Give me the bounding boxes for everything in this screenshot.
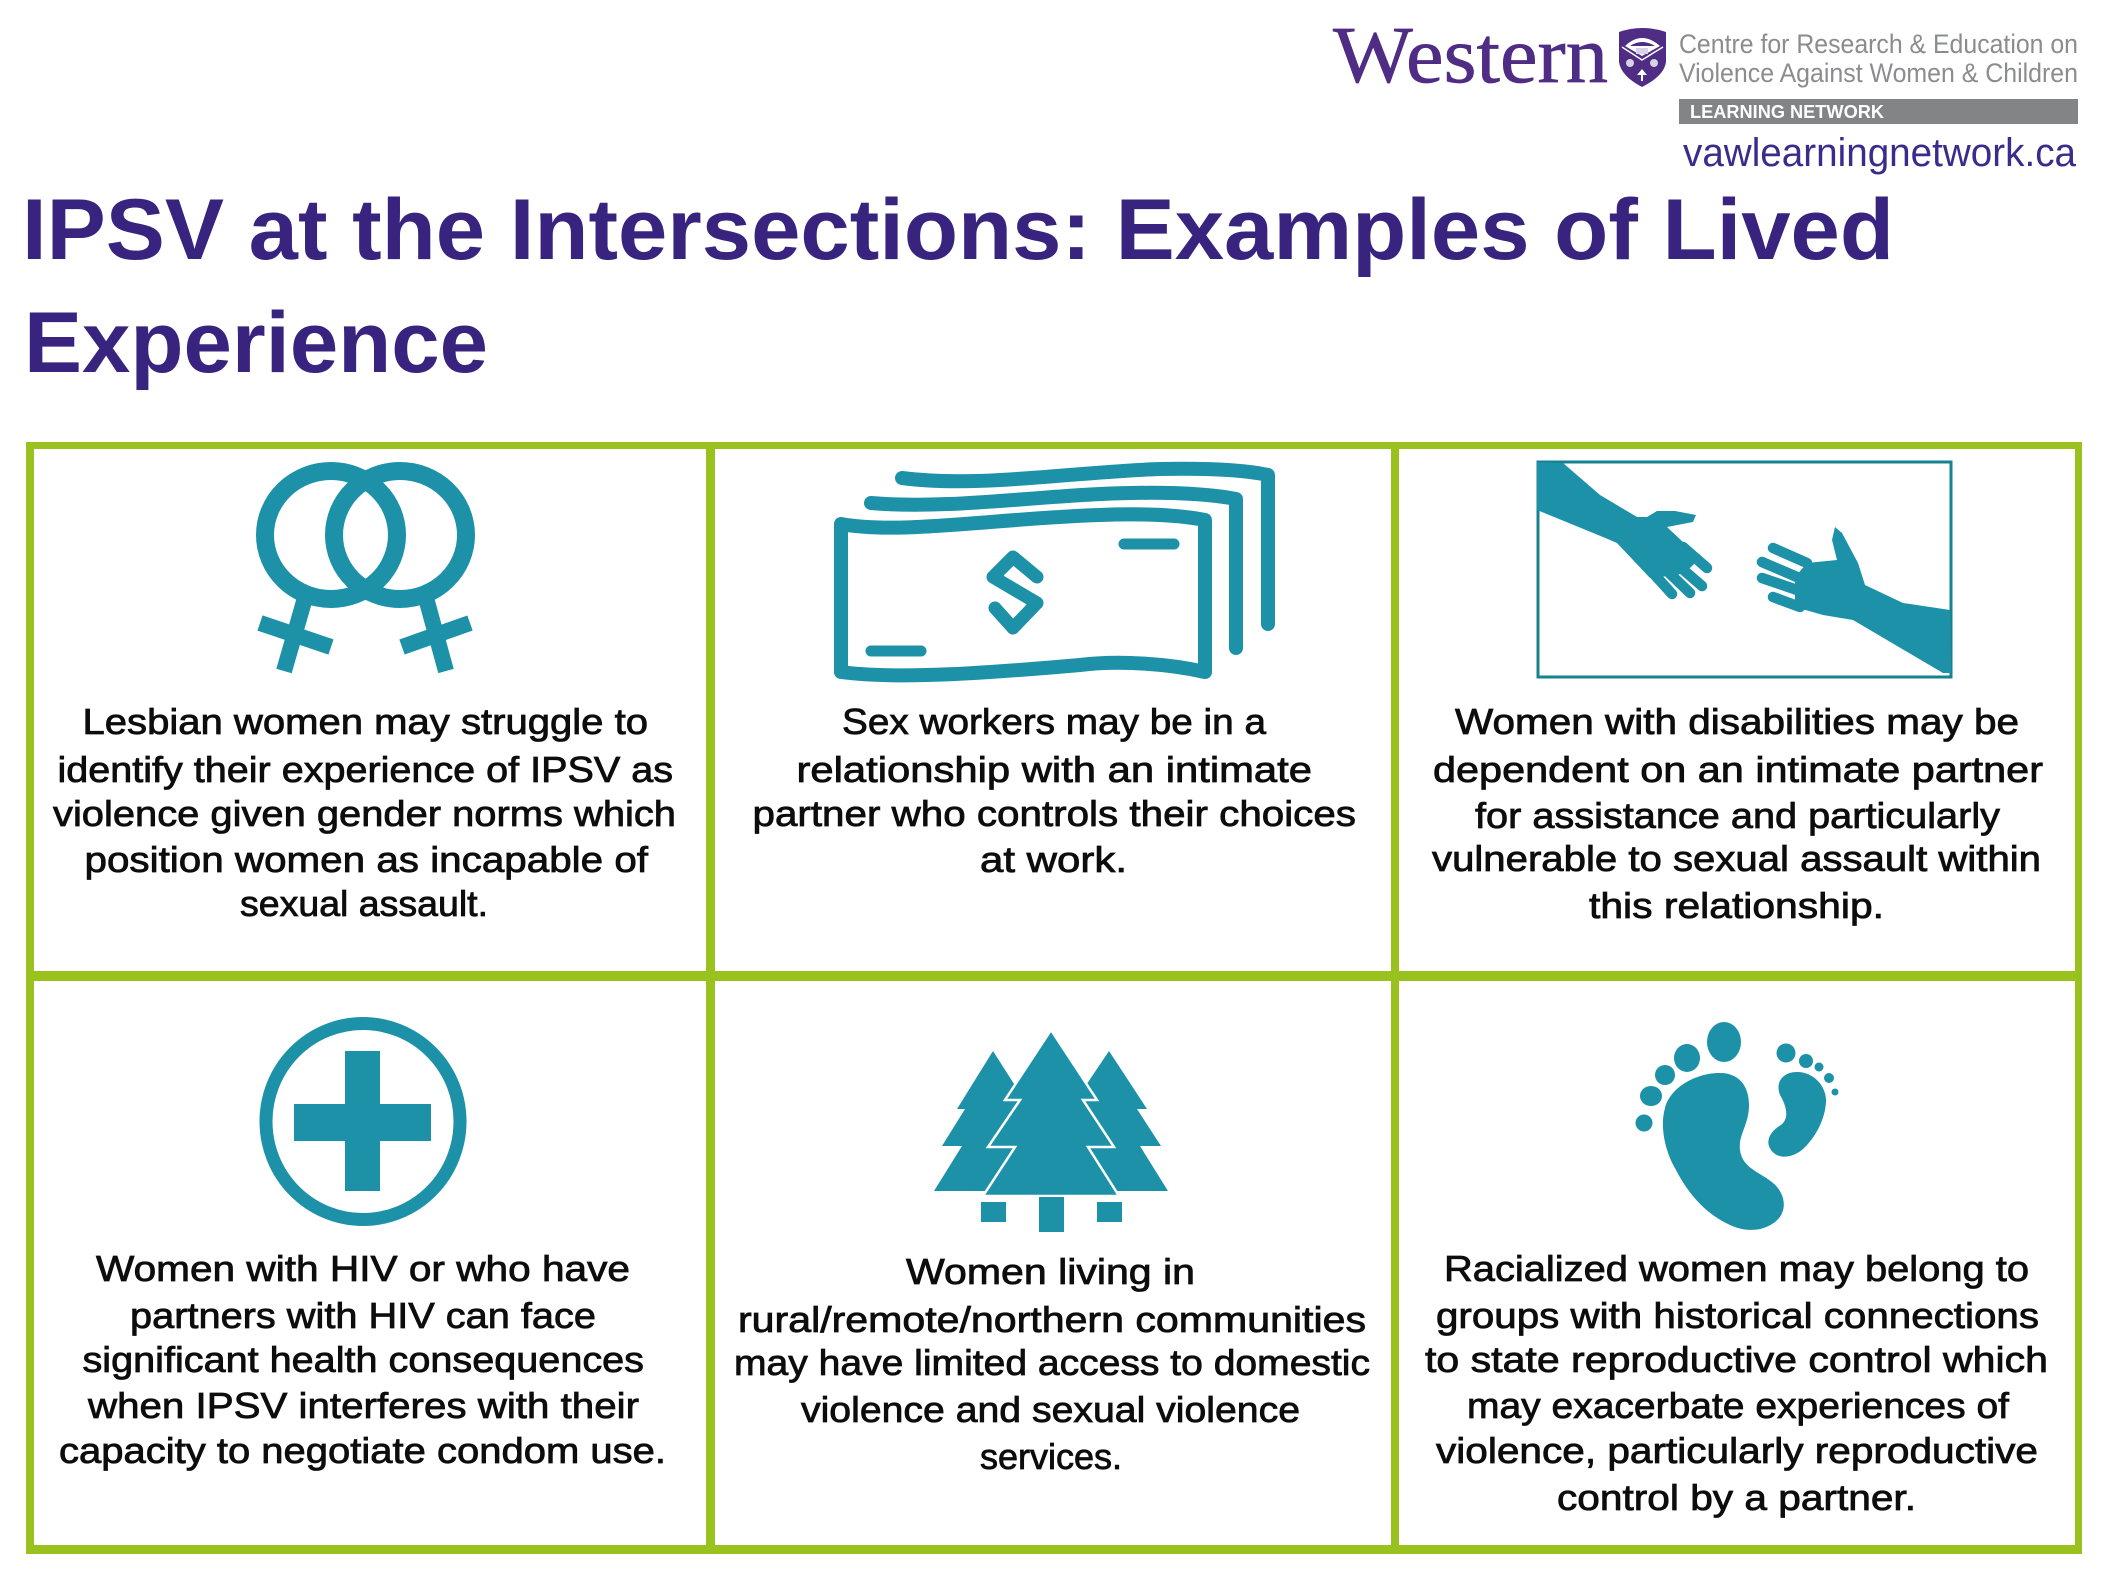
text block: violence given gender norms which [53, 793, 676, 834]
text block: sexual assault. [240, 883, 488, 924]
learning network bar [1679, 99, 2078, 124]
text block: identify their experience of IPSV as [58, 749, 673, 790]
text block: at work. [980, 839, 1127, 880]
text block: groups with historical connections [1436, 1295, 2039, 1336]
text block: when IPSV interferes with their [87, 1385, 639, 1426]
text block: may exacerbate experiences of [1467, 1385, 2010, 1426]
icon: university shield [1619, 28, 1666, 87]
text block: violence, particularly reproductive [1436, 1430, 2038, 1471]
text block: vulnerable to sexual assault within [1432, 838, 2041, 879]
centre name: Violence Against Women & Children [1679, 58, 2078, 88]
text block: services. [980, 1436, 1122, 1477]
Western wordmark: Western [1333, 12, 1608, 100]
icon: pine trees [934, 1030, 1168, 1232]
title [22, 182, 1894, 391]
panel: lesbian women [30, 445, 710, 976]
text block [734, 1251, 1370, 1477]
text block: control by a partner. [1557, 1477, 1916, 1518]
icon: interlocked female symbols [260, 471, 470, 671]
text block: for assistance and particularly [1475, 795, 2000, 836]
panel: racialized women [1395, 976, 2080, 1550]
text block: rural/remote/northern communities [738, 1299, 1366, 1340]
text block [53, 701, 676, 924]
centre name: Centre for Research & Education on [1679, 29, 2078, 59]
panel: sex workers [710, 445, 1395, 976]
icon: medical cross in circle [266, 1024, 460, 1220]
panel: rural women [710, 976, 1395, 1550]
text block: violence and sexual violence [801, 1389, 1300, 1430]
icon: footprints [1636, 1022, 1838, 1230]
title: Experience [24, 295, 488, 391]
icon: banknotes [841, 469, 1268, 675]
text block [59, 1248, 666, 1471]
panel: women with disabilities [1395, 445, 2080, 976]
text block [1432, 701, 2043, 926]
text block: partners with HIV can face [130, 1295, 596, 1336]
text block: capacity to negotiate condom use. [59, 1430, 666, 1471]
website url: vawlearningnetwork.ca [1683, 131, 2077, 175]
centre name [1679, 29, 2078, 88]
text block: Women with disabilities may be [1455, 701, 2019, 742]
text block: Women living in [906, 1251, 1195, 1292]
header logo block [1333, 12, 2078, 175]
text block: Sex workers may be in a [842, 701, 1267, 742]
text block: this relationship. [1589, 885, 1884, 926]
green grid frame [26, 442, 2082, 1554]
learning network bar: LEARNING NETWORK [1690, 102, 1884, 122]
text block: Women with HIV or who have [96, 1248, 630, 1289]
icon: reaching hands [1537, 462, 1951, 677]
text block: to state reproductive control which [1425, 1339, 2048, 1380]
panel: women with HIV [30, 976, 710, 1550]
text block [1425, 1248, 2048, 1518]
text block: Lesbian women may struggle to [82, 701, 648, 742]
text block: position women as incapable of [84, 839, 649, 880]
text block: dependent on an intimate partner [1433, 749, 2043, 790]
title: IPSV at the Intersections: Examples of Lived [22, 182, 1894, 278]
text block: relationship with an intimate [796, 749, 1312, 790]
text block: partner who controls their choices [752, 793, 1356, 834]
text block: Racialized women may belong to [1444, 1248, 2029, 1289]
text block: significant health consequences [82, 1339, 644, 1380]
text block [752, 701, 1356, 880]
text block: may have limited access to domestic [734, 1342, 1370, 1383]
